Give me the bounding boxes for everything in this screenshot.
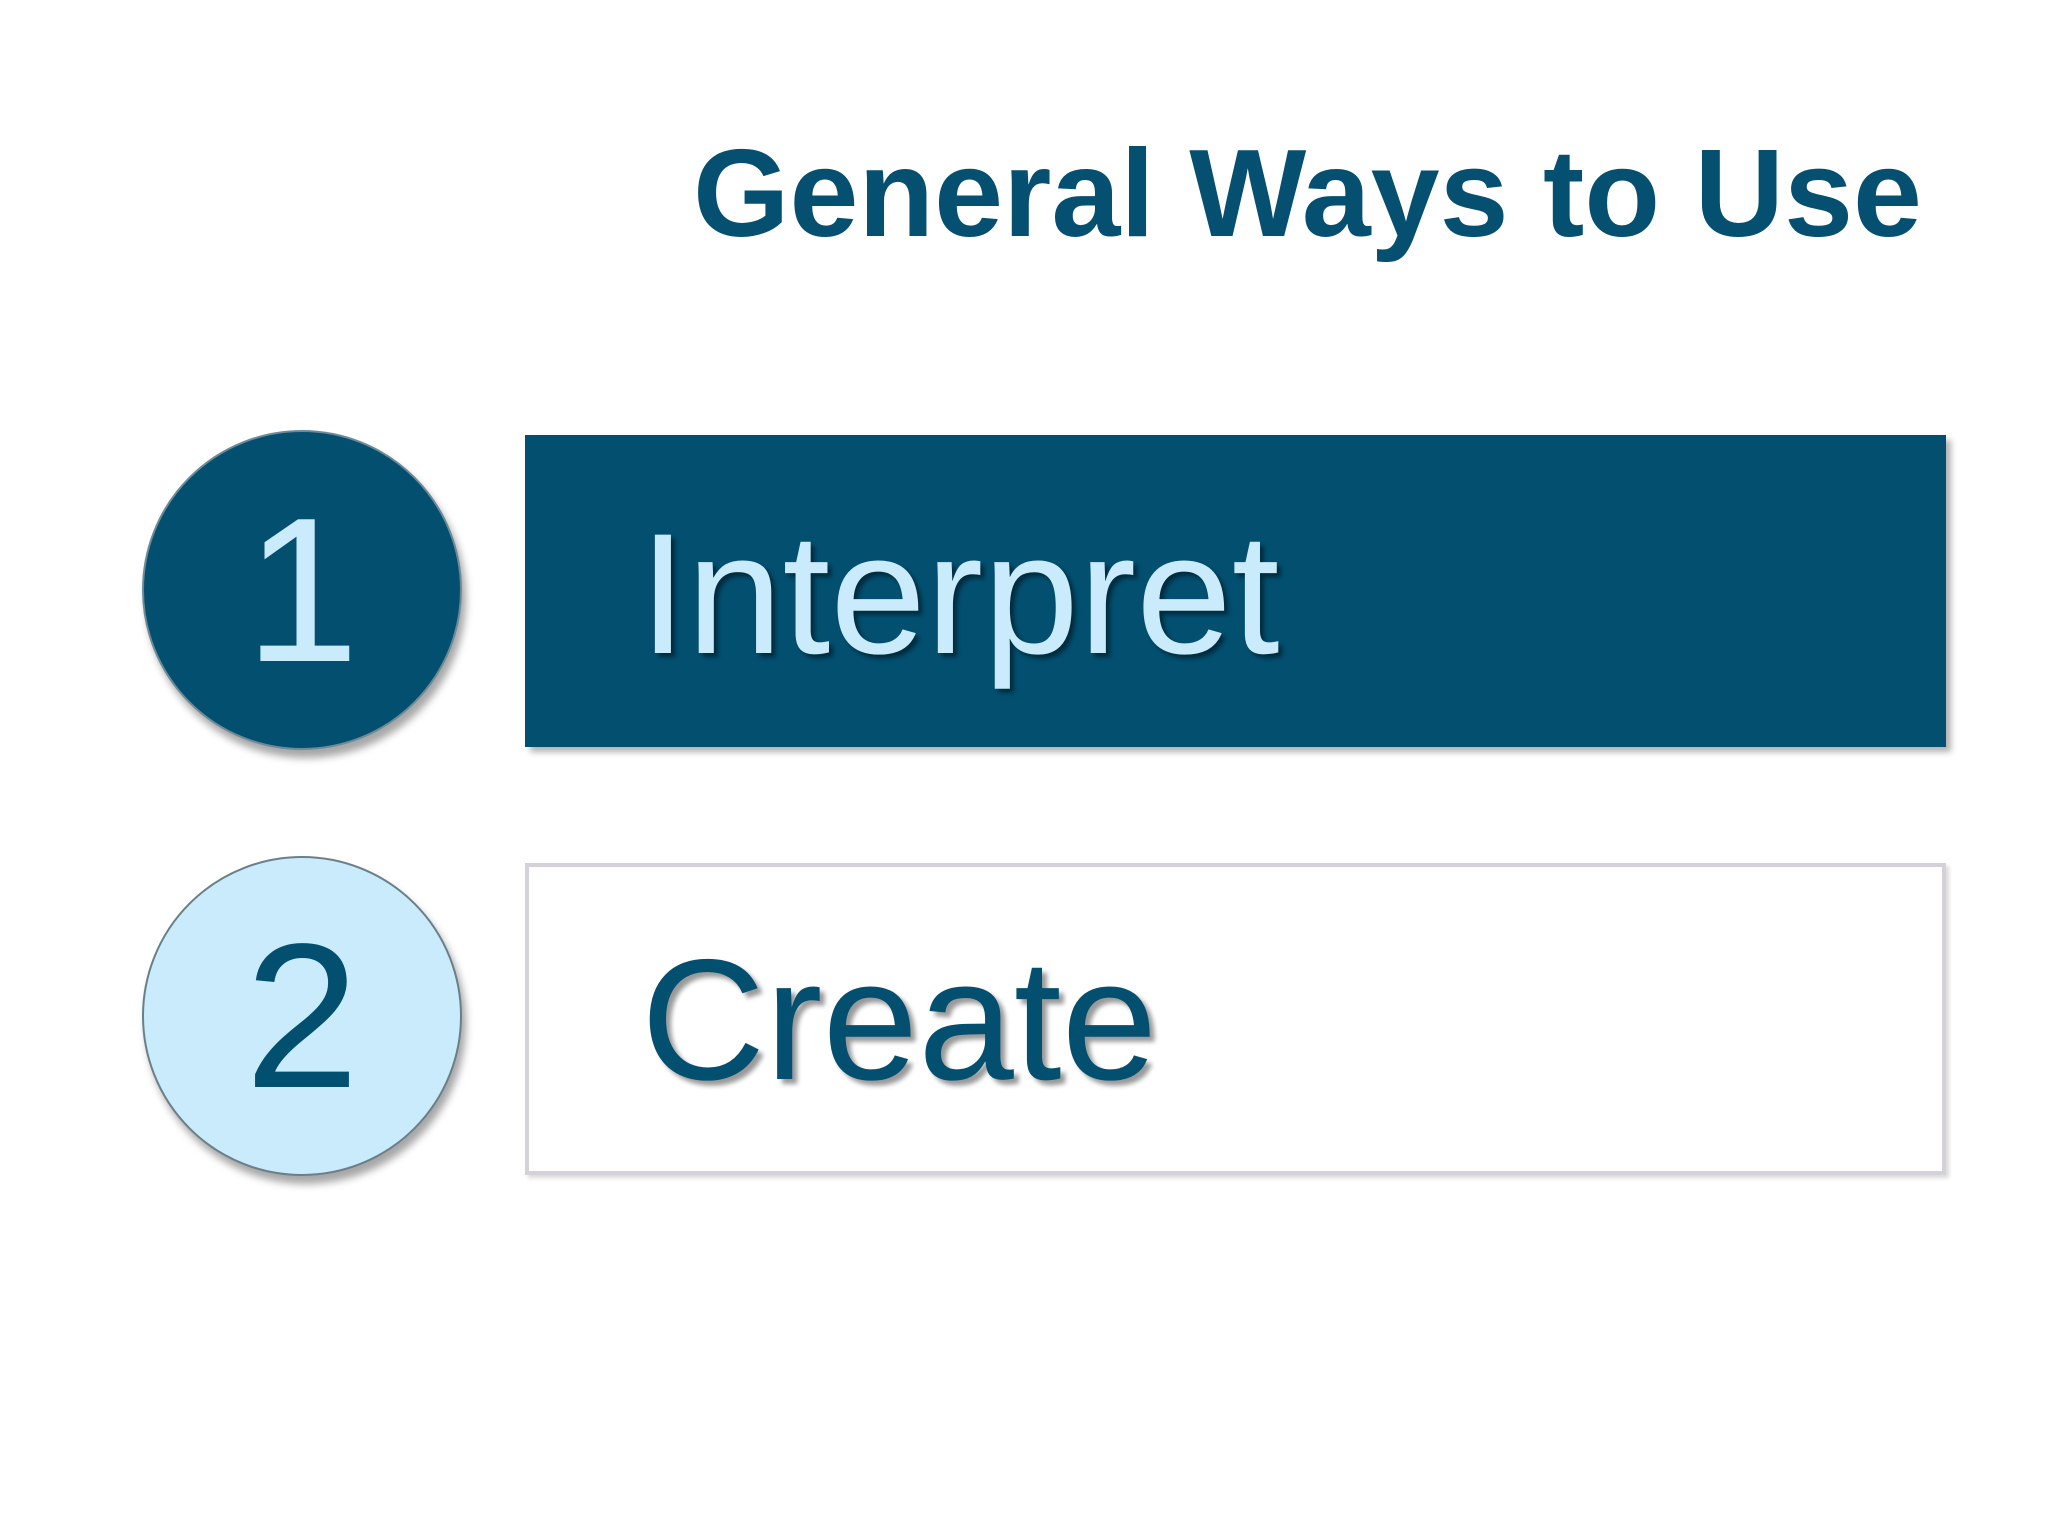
circle: number 1 (142, 430, 462, 750)
label: Create: Create (641, 924, 1157, 1116)
circle: number 2: 2 (245, 901, 359, 1131)
box: Interpret (525, 435, 1946, 747)
circle: number 2 (142, 856, 462, 1176)
label: Interpret: Interpret (639, 498, 1280, 690)
box: Create (525, 863, 1946, 1175)
title: General Ways to Use (693, 125, 1922, 263)
circle: number 1: 1 (245, 475, 359, 705)
